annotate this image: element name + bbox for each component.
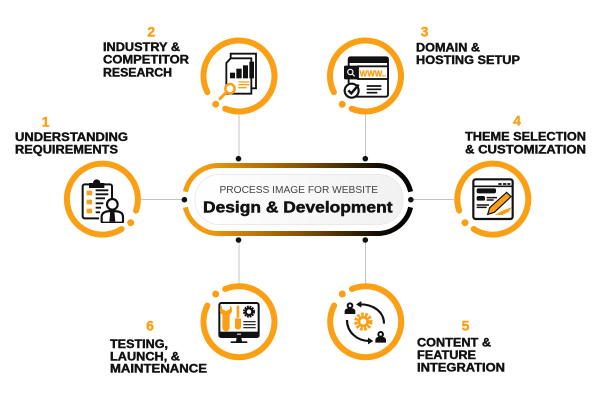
step 6 ring <box>203 286 274 357</box>
step 5 number: 5 <box>462 318 470 334</box>
step 2 number: 2 <box>147 24 155 40</box>
icon: browser and pencil <box>473 179 513 219</box>
step 3 label: DOMAIN & <box>416 41 481 54</box>
step 1 number: 1 <box>42 114 50 130</box>
step 6 label: LAUNCH, & <box>110 351 181 364</box>
connector lines <box>141 114 454 284</box>
step 1 ring <box>67 164 138 235</box>
step 3 number: 3 <box>421 24 429 40</box>
icon: domain window and check <box>344 57 389 98</box>
panel: step 1 understanding requirements <box>15 114 138 235</box>
panel: step 4 theme selection and customization <box>457 113 586 235</box>
step 5 ring <box>330 286 401 357</box>
step 6 label: TESTING, <box>110 338 168 351</box>
step 3 ring <box>330 40 401 111</box>
step 4 ring <box>457 164 528 235</box>
icon: clipboard and person <box>83 179 124 223</box>
step 6 number: 6 <box>146 318 154 334</box>
icon: report and magnifier <box>220 54 256 99</box>
step 1 label: REQUIREMENTS <box>15 143 118 156</box>
subtitle: PROCESS IMAGE FOR WEBSITE <box>220 185 378 196</box>
step 5 label: CONTENT & <box>417 337 492 350</box>
panel: step 6 testing, launch and maintenance <box>110 286 274 376</box>
icon: monitor with tools <box>219 303 259 343</box>
icon: gear, cycle arrows and people <box>345 301 385 344</box>
panel: step 3 domain and hosting setup <box>330 24 520 111</box>
panel: step 5 content and feature integration <box>330 286 505 375</box>
step 2 label: COMPETITOR <box>103 53 190 66</box>
pill outline bottom <box>185 207 411 234</box>
step 4 number: 4 <box>513 113 521 129</box>
main heading: Design & Development <box>203 200 392 216</box>
step 6 label: MAINTENANCE <box>110 363 207 376</box>
step 2 label: INDUSTRY & <box>103 41 181 54</box>
connector dots <box>182 156 414 243</box>
panel: step 2 industry and competitor research <box>103 24 274 111</box>
pill outline top <box>185 166 411 192</box>
step 5 label: FEATURE <box>417 349 476 362</box>
panel: central title pill <box>185 166 411 234</box>
step 4 label: THEME SELECTION <box>465 131 586 144</box>
step 2 ring <box>203 40 274 111</box>
step 4 label: & CUSTOMIZATION <box>465 143 586 156</box>
step 2 label: RESEARCH <box>103 66 172 79</box>
step 1 label: UNDERSTANDING <box>15 131 128 144</box>
step 5 label: INTEGRATION <box>417 362 505 375</box>
icon: domain window and check: WWW.. <box>360 68 386 78</box>
pill inner panel <box>195 174 403 224</box>
step 3 label: HOSTING SETUP <box>416 54 520 67</box>
